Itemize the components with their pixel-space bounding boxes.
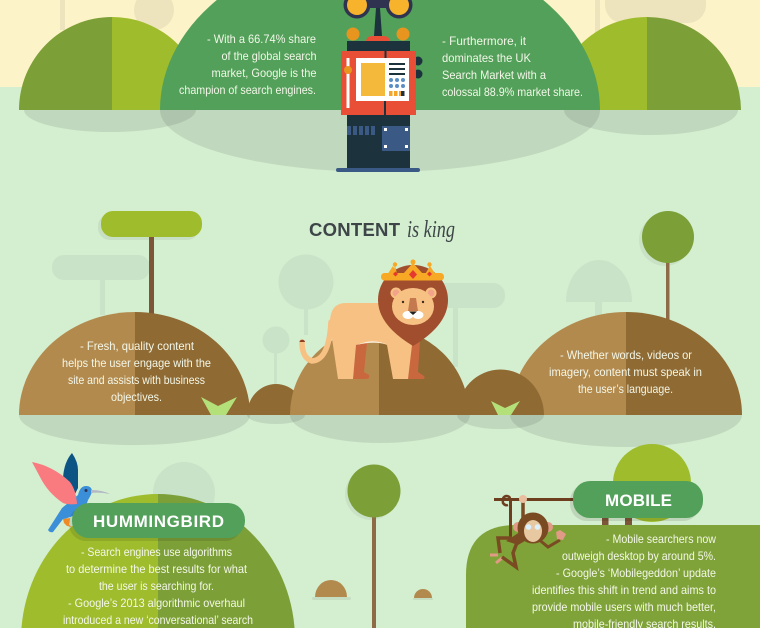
text: search engine algorithms: the user is searching for. bbox=[99, 579, 214, 593]
background tree bottom bbox=[153, 462, 215, 524]
text: fresh quality content: objectives. bbox=[111, 390, 162, 404]
heading: mobile pill bbox=[570, 481, 703, 521]
heading: content is king: CONTENT bbox=[309, 219, 401, 240]
panel: right green hill bbox=[553, 17, 741, 135]
icon: hummingbird bbox=[32, 453, 110, 532]
panel: left brown hill bbox=[19, 312, 250, 445]
smaller tan mound bbox=[413, 589, 433, 600]
text: UK search market: Search Market with a bbox=[442, 68, 546, 82]
text: global search share: market, Google is the bbox=[212, 66, 317, 80]
text: search engine algorithms: - Search engines use algorithms bbox=[81, 545, 232, 559]
icon: lion with crown bbox=[300, 260, 448, 379]
text: mobile searchers: - Google’s ‘Mobilegeddon’ update bbox=[556, 566, 716, 580]
text: user's language: the user’s language. bbox=[578, 382, 673, 396]
icon: right leaf bbox=[491, 401, 520, 415]
heading: content is king: is king bbox=[407, 217, 455, 243]
text: mobile searchers: provide mobile users with much better, bbox=[532, 600, 716, 614]
text: UK search market: dominates the UK bbox=[442, 51, 531, 65]
text: search engine algorithms: introduced a new ‘conversational’ search bbox=[63, 613, 253, 627]
small right brown mound bbox=[457, 369, 544, 429]
panel: hummingbird hill bbox=[21, 494, 295, 628]
text: fresh quality content: - Fresh, quality content bbox=[80, 339, 195, 353]
text: global search share: of the global search bbox=[222, 49, 316, 63]
text: user's language: imagery, content must speak in bbox=[549, 365, 702, 379]
heading: hummingbird pill: HUMMINGBIRD bbox=[93, 512, 224, 531]
text: mobile searchers: - Mobile searchers now bbox=[606, 532, 716, 546]
panel: left green hill bbox=[19, 17, 205, 132]
text: global search share: champion of search engines. bbox=[179, 83, 316, 97]
background trees top bbox=[60, 0, 706, 35]
icon: monkey on branch bbox=[490, 495, 576, 567]
icon: centre tree bbox=[345, 464, 400, 628]
small tan mound bbox=[312, 580, 351, 600]
icon: left flat-top tree bbox=[98, 211, 202, 315]
text: mobile searchers: outweigh desktop by around 5%. bbox=[562, 549, 716, 563]
text: search engine algorithms: to determine the best results for what bbox=[66, 562, 248, 576]
icon: right round tree bbox=[639, 211, 694, 322]
heading: content is king bbox=[309, 217, 455, 243]
text: user's language: - Whether words, videos or bbox=[560, 348, 692, 362]
panel: central lion hill bbox=[290, 327, 470, 443]
heading: hummingbird pill bbox=[69, 503, 245, 541]
text: fresh quality content: helps the user engage with the bbox=[62, 356, 211, 370]
text: fresh quality content: site and assists with business bbox=[68, 373, 205, 387]
background trees middle bbox=[52, 254, 632, 385]
icon: left leaf bbox=[201, 397, 237, 415]
text: global search share: - With a 66.74% share bbox=[207, 32, 316, 46]
small brown mound bbox=[247, 384, 305, 424]
panel: right brown hill bbox=[510, 312, 742, 447]
icon: search robot with binoculars bbox=[336, 0, 422, 172]
text: mobile searchers: identifies this shift in trend and aims to bbox=[532, 583, 716, 597]
text: UK search market: colossal 88.9% market share. bbox=[442, 85, 583, 99]
text: UK search market: - Furthermore, it bbox=[442, 34, 527, 48]
panel: central search market hill bbox=[160, 0, 600, 172]
panel: mobile bbox=[466, 525, 760, 628]
icon: mobile tree bbox=[602, 444, 691, 526]
text: search engine algorithms: - Google’s 2013 algorithmic overhaul bbox=[68, 596, 245, 610]
heading: mobile pill: MOBILE bbox=[605, 491, 672, 510]
